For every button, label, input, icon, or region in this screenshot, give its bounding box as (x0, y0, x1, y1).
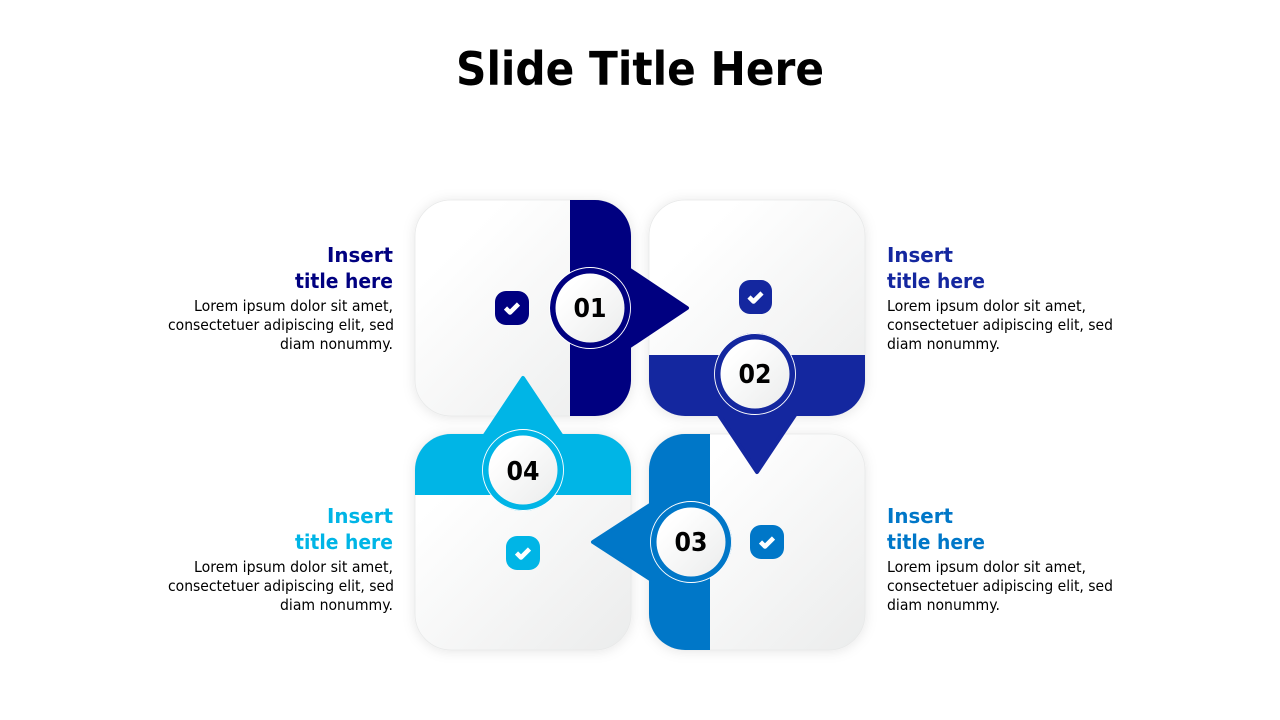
text block 02 (887, 243, 1113, 353)
text block 03: diam nonummy. (887, 596, 1000, 614)
arrow 04 (485, 378, 561, 435)
number badge 02 (714, 333, 796, 414)
number badge 01 (550, 268, 630, 348)
arrow 01 (630, 270, 687, 346)
text block 02: Insert (887, 243, 953, 267)
text block 04: title here (295, 530, 393, 554)
icon: check 04 (506, 536, 540, 570)
band 02 (649, 355, 865, 416)
panel: card 04 (415, 434, 631, 650)
text block 03: consectetuer adipiscing elit, sed (887, 577, 1113, 595)
band 01 (570, 200, 631, 416)
text block 03: Lorem ipsum dolor sit amet, (887, 558, 1086, 576)
number badge 03 (650, 502, 732, 582)
text block 02: consectetuer adipiscing elit, sed (887, 316, 1113, 334)
panel: card 01 (415, 200, 631, 416)
band 03 (649, 434, 710, 650)
arrow 03 (593, 505, 650, 579)
title: Slide Title Here (456, 42, 824, 96)
text block 04: Insert (327, 504, 393, 528)
text block 01: Insert (327, 243, 393, 267)
number badge 01: 01 (574, 294, 606, 324)
text block 03 (887, 504, 1113, 614)
text block 01 (168, 243, 394, 353)
text block 04: diam nonummy. (280, 596, 393, 614)
text block 04: consectetuer adipiscing elit, sed (168, 577, 394, 595)
text block 01: Lorem ipsum dolor sit amet, (194, 297, 393, 315)
icon: check 01 (495, 291, 529, 325)
text block 03: Insert (887, 504, 953, 528)
text block 01: consectetuer adipiscing elit, sed (168, 316, 394, 334)
arrow 02 (719, 415, 795, 472)
text block 02: title here (887, 269, 985, 293)
band 04 (415, 434, 631, 495)
text block 01: title here (295, 269, 393, 293)
text block 01: diam nonummy. (280, 335, 393, 353)
number badge 02: 02 (738, 360, 772, 390)
text block 02: diam nonummy. (887, 335, 1000, 353)
text block 02: Lorem ipsum dolor sit amet, (887, 297, 1086, 315)
number badge 03: 03 (674, 528, 708, 558)
number badge 04: 04 (506, 457, 540, 487)
icon: check 02 (739, 280, 772, 314)
panel: card 02 (649, 200, 865, 416)
number badge 04 (482, 430, 564, 511)
text block 04: Lorem ipsum dolor sit amet, (194, 558, 393, 576)
icon: check 03 (750, 525, 784, 559)
text block 03: title here (887, 530, 985, 554)
text block 04 (168, 504, 394, 614)
panel: card 03 (649, 434, 865, 650)
